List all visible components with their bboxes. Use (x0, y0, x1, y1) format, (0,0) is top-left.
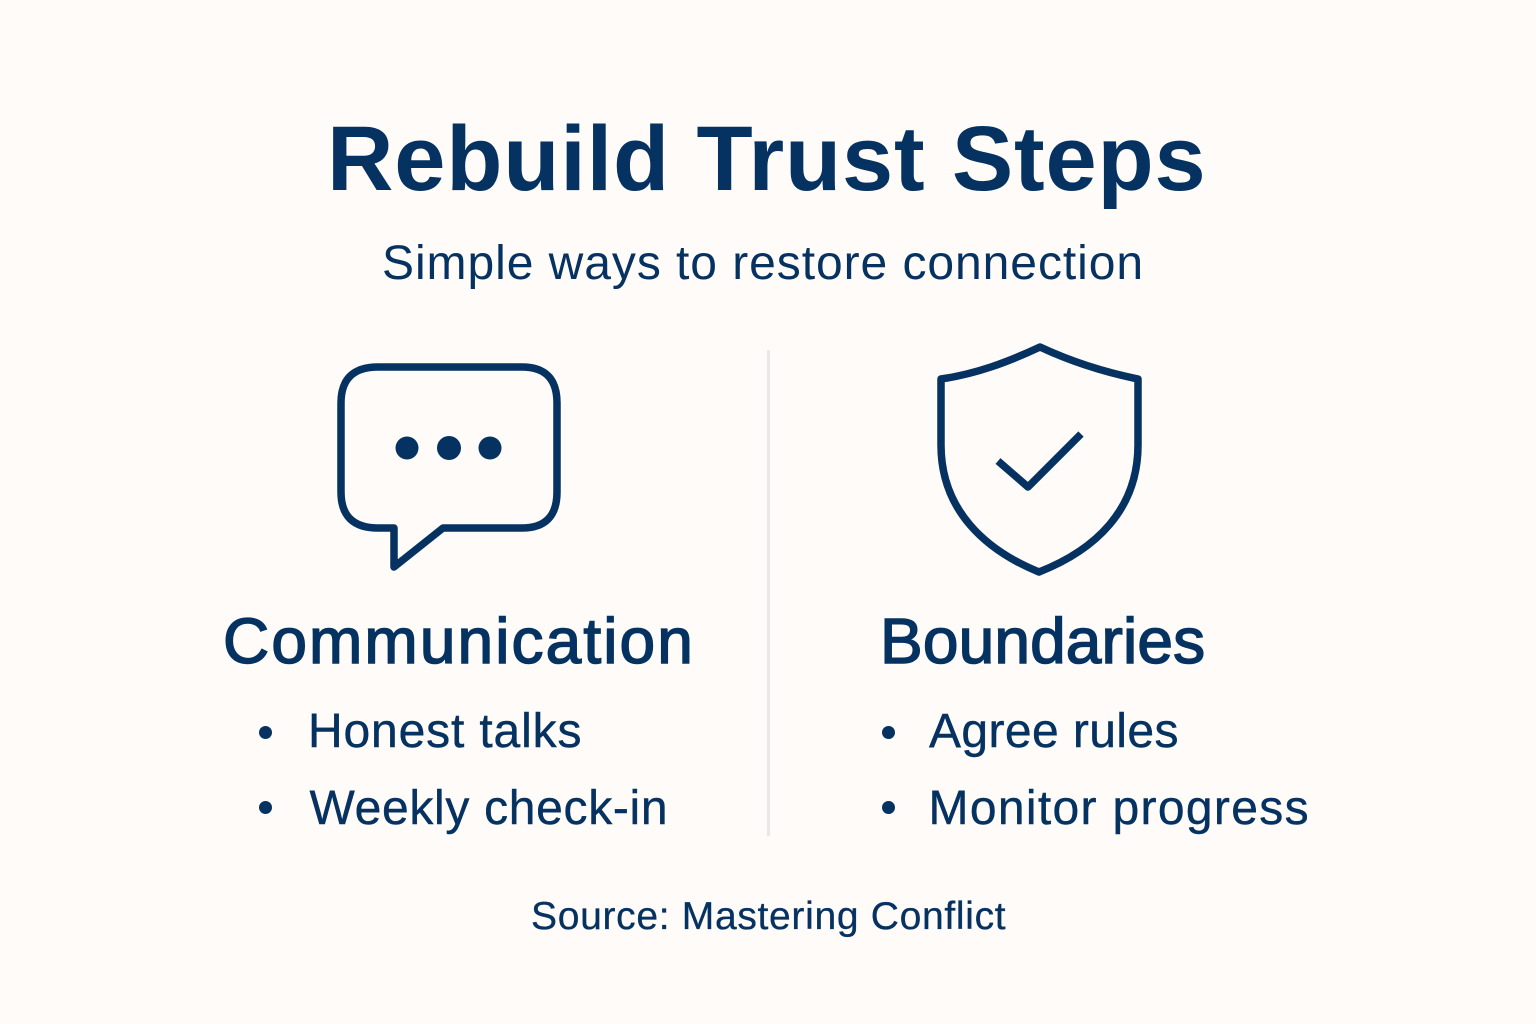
panel: boundaries (880, 605, 1310, 835)
panel: communication (223, 605, 695, 835)
heading: boundaries: Boundaries (880, 605, 1205, 677)
title: Rebuild Trust Steps (327, 108, 1206, 210)
subtitle: Simple ways to restore connection (382, 237, 1144, 290)
icon: speech bubble (337, 363, 561, 571)
bullet: weekly check-in: Weekly check-in (310, 782, 668, 835)
heading: communication: Communication (223, 605, 695, 677)
divider (767, 350, 770, 836)
bullet: honest talks: Honest talks (308, 705, 582, 758)
bullet: monitor progress: Monitor progress (928, 782, 1310, 835)
bullet: agree rules: Agree rules (929, 705, 1179, 758)
source: Source: Mastering Conflict (531, 895, 1006, 938)
icon: shield with check (937, 343, 1142, 576)
